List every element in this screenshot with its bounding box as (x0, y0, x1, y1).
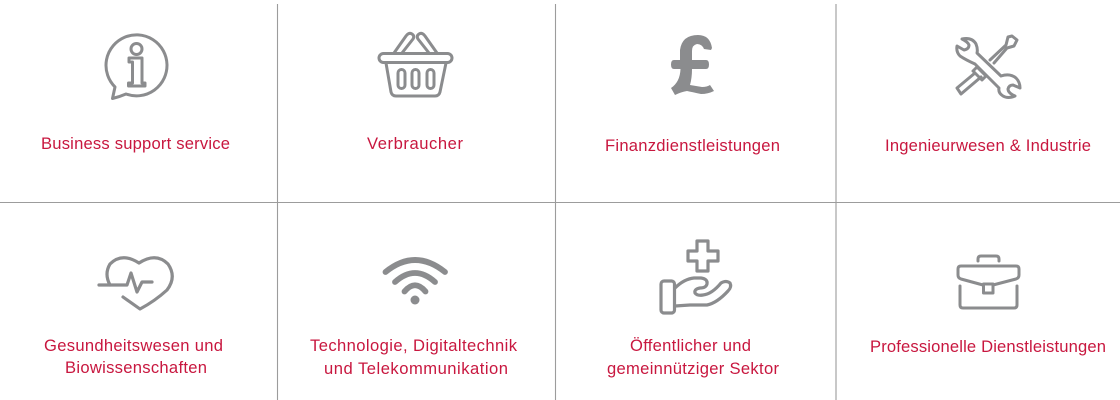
panel: Oeffentlicher und gemeinnuetziger Sektor (607, 241, 779, 378)
icon: hand with plus (661, 241, 731, 313)
label: Technologie, Digitaltechnik (310, 336, 518, 355)
label line 2: Biowissenschaften (65, 358, 207, 377)
label: Öffentlicher und (630, 336, 751, 355)
label: Professionelle Dienstleistungen (870, 337, 1106, 356)
label: Business support service (41, 134, 230, 153)
panel: Finanzdienstleistungen (605, 35, 780, 155)
label: Verbraucher (367, 134, 463, 153)
panel: Verbraucher (367, 33, 463, 153)
panel: Ingenieurwesen und Industrie (885, 36, 1091, 155)
icon: heart with pulse (99, 258, 172, 309)
panel: Technologie, Digitaltechnik und Telekommunikation (310, 260, 518, 378)
label: Gesundheitswesen und (44, 336, 223, 355)
label: Finanzdienstleistungen (605, 136, 780, 155)
label line 2: gemeinnütziger Sektor (607, 359, 779, 378)
icon: shopping basket (379, 33, 452, 96)
icon: briefcase (958, 256, 1019, 308)
panel: Professionelle Dienstleistungen (870, 256, 1106, 356)
icon: info speech bubble (106, 35, 167, 98)
icon: wrench and screwdriver (957, 36, 1020, 98)
label: Ingenieurwesen & Industrie (885, 136, 1091, 155)
icon: wifi (386, 260, 445, 304)
panel: Gesundheitswesen und Biowissenschaften (44, 258, 223, 377)
icon: pound sign (671, 35, 714, 95)
panel: business support service (41, 35, 230, 153)
label line 2: und Telekommunikation (324, 359, 508, 378)
